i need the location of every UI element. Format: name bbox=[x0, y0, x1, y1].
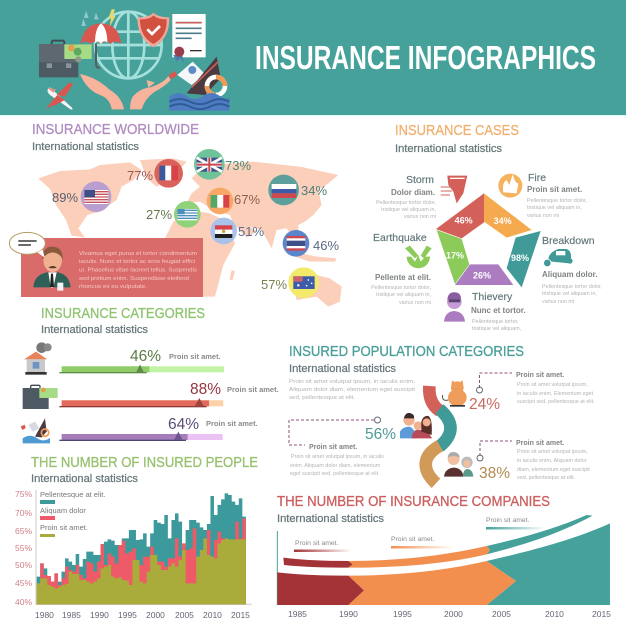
value: 46%: 46% bbox=[313, 238, 339, 253]
series label 3: Proin sit amet. bbox=[486, 517, 530, 524]
pentagon chart: 17% bbox=[446, 251, 464, 261]
panel: insurance cases bbox=[371, 123, 602, 332]
text: elderly: in iaculis enim. Aliquam dolor bbox=[517, 458, 587, 464]
y axis labels: 45% bbox=[15, 578, 32, 588]
label: fire bbox=[527, 172, 587, 219]
heading: insured people: THE NUMBER OF INSURED PEOPLE bbox=[31, 455, 258, 471]
label: fire: tristique vel aliquam in, bbox=[527, 205, 582, 211]
text: elderly: sed, pellentesque at elit. bbox=[517, 475, 575, 481]
label: thievery: Thievery bbox=[472, 291, 513, 303]
flag: Russia 34% bbox=[268, 175, 299, 205]
icon: globe bbox=[95, 12, 162, 78]
icon: businessman bbox=[33, 247, 71, 291]
legend bbox=[40, 490, 105, 537]
icon: sinking ship bbox=[168, 57, 229, 111]
panel: number of insured people bbox=[15, 455, 258, 620]
intro text: sed, pellentesque at elit. bbox=[289, 395, 355, 401]
label: earthquake: Pellentesque tortor dolor, bbox=[371, 285, 431, 291]
text: elderly: Proin sit amet. bbox=[516, 440, 564, 447]
x axis labels: 2005 bbox=[492, 609, 511, 619]
callout text: ur. Phasellus vitae laoreet tellus. Suspendis bbox=[79, 268, 197, 274]
value: 77%: 77% bbox=[127, 168, 153, 183]
flag: UK 73% bbox=[194, 149, 225, 180]
heading: cases: INSURANCE CASES bbox=[395, 123, 519, 139]
heading: categories: INSURANCE CATEGORIES bbox=[41, 306, 205, 322]
x axis labels: 2015 bbox=[592, 609, 611, 619]
label: storm: Storm bbox=[406, 174, 434, 186]
value: 88%: 88% bbox=[190, 381, 221, 398]
text: cat bbox=[516, 372, 595, 405]
label: storm: Dolor diam. bbox=[391, 188, 435, 197]
label: thievery: Pellentesque tortor, bbox=[472, 319, 519, 325]
x axis labels: 1995 bbox=[118, 610, 137, 620]
label: storm bbox=[376, 174, 436, 220]
label: breakdown: Pellentesque tortor dolor, bbox=[542, 284, 602, 290]
callout text: rhoncus ex eu vulputate. bbox=[79, 284, 148, 290]
text: cat: suscipit sed, pellentesque at elit. bbox=[517, 399, 595, 405]
subheading: cases: International statistics bbox=[395, 143, 502, 155]
value: 57%: 57% bbox=[261, 277, 287, 292]
value: 27%: 27% bbox=[146, 207, 172, 222]
label: breakdown bbox=[542, 235, 602, 305]
flag: USA 89% bbox=[81, 181, 111, 212]
label: earthquake: Pellente at elit. bbox=[375, 273, 431, 282]
label: storm: Pellentesque tortor dolor, bbox=[376, 200, 436, 206]
y axis labels: 50% bbox=[15, 560, 32, 570]
intro text bbox=[289, 379, 416, 401]
callout text: iaculis. Nunc et tortor ac eros feugiat effici bbox=[79, 259, 195, 265]
x axis labels: 2010 bbox=[545, 609, 564, 619]
text: family: Proin sit amet volutpat ipsum, in iaculis bbox=[291, 454, 384, 460]
world map bbox=[38, 158, 342, 307]
flag: Australia 57% bbox=[288, 267, 319, 298]
text: elderly bbox=[516, 440, 590, 481]
icon: banknotes bbox=[64, 44, 92, 62]
label: fire: Proin sit amet. bbox=[527, 185, 582, 194]
x axis labels bbox=[288, 609, 611, 619]
y axis labels: 75% bbox=[15, 489, 32, 499]
icon: car bbox=[544, 249, 573, 266]
label: storm: tristique vel aliquam in, bbox=[381, 207, 436, 213]
icon: briefcase small bbox=[23, 385, 58, 409]
icon: ship small bbox=[21, 418, 50, 443]
intro text: Proin sit amet volutpat ipsum, in iaculis enim, bbox=[289, 379, 416, 385]
value: 34%: 34% bbox=[301, 183, 327, 198]
subheading: categories: International statistics bbox=[41, 324, 148, 336]
label: breakdown: varius non mi bbox=[542, 299, 574, 305]
s-curve chart bbox=[426, 386, 450, 483]
x axis labels: 2000 bbox=[444, 609, 463, 619]
dashed connector: cat bbox=[476, 373, 512, 393]
label: fire: Pellentesque tortor dolor, bbox=[527, 198, 587, 204]
callout text: Vivamus eget purus et tortor condimentum bbox=[79, 251, 197, 257]
x axis labels: 1990 bbox=[339, 609, 358, 619]
value: 51%: 51% bbox=[238, 224, 264, 239]
x axis labels: 1980 bbox=[35, 610, 54, 620]
heading: population: INSURED POPULATION CATEGORIES bbox=[289, 344, 524, 360]
pentagon chart bbox=[436, 193, 541, 287]
header icons bbox=[39, 9, 229, 111]
value: 64%: 64% bbox=[168, 416, 199, 433]
y axis labels: 70% bbox=[15, 508, 32, 518]
text: family: Proin sit amet. bbox=[309, 444, 357, 451]
panel: insurance categories bbox=[21, 306, 279, 443]
icon: family bbox=[400, 413, 432, 438]
label: breakdown: Breakdown bbox=[542, 235, 595, 247]
icon: airplane bbox=[46, 83, 73, 109]
value: 56%: 56% bbox=[365, 426, 396, 443]
text: elderly: diam, elementum eget suscipit bbox=[517, 467, 590, 473]
x axis labels: 2015 bbox=[231, 610, 250, 620]
icon: fire bbox=[498, 174, 522, 198]
flag: Italy 67% bbox=[207, 188, 233, 214]
icon: shield bbox=[137, 13, 169, 47]
label: thievery bbox=[471, 291, 526, 332]
label: earthquake: varius non mi bbox=[399, 300, 431, 306]
bar: 88% bbox=[59, 398, 223, 407]
x axis labels: 2000 bbox=[146, 610, 165, 620]
x axis labels: 2005 bbox=[175, 610, 194, 620]
bar label 1: Proin sit amet. bbox=[169, 352, 221, 361]
value: 89%: 89% bbox=[52, 190, 78, 205]
label: earthquake: Earthquake bbox=[373, 232, 427, 244]
value: 73%: 73% bbox=[225, 158, 251, 173]
callout text: sed pretium enim. Suspendisse eleifend bbox=[79, 276, 189, 282]
series label 1: Proin sit amet. bbox=[295, 540, 339, 547]
subheading: population: International statistics bbox=[289, 363, 396, 375]
icon: umbrella bbox=[81, 9, 121, 68]
icon: elderly couple bbox=[444, 452, 473, 477]
subheading: worldwide: International statistics bbox=[32, 141, 139, 153]
icon: cat bbox=[443, 380, 467, 407]
text: cat: in iaculis enim. Elementum eget bbox=[517, 391, 594, 397]
y axis labels bbox=[15, 489, 32, 607]
y axis labels: 55% bbox=[15, 543, 32, 553]
subheading: insured people: International statistics bbox=[31, 473, 138, 485]
heading: companies: THE NUMBER OF INSURANCE COMPANIES bbox=[277, 494, 550, 510]
arrow chart bbox=[277, 515, 610, 605]
label: earthquake: tristique vel aliquam in, bbox=[376, 292, 431, 298]
text: family: eget suscipit sed, pellentesque at elit. bbox=[290, 471, 380, 477]
series label 1 bbox=[294, 540, 352, 552]
bar label 2: Proin sit amet. bbox=[227, 385, 279, 394]
flag: Egypt 51% bbox=[210, 218, 237, 244]
x axis labels bbox=[35, 610, 250, 620]
value: 46%: 46% bbox=[130, 348, 161, 365]
x axis labels: 1985 bbox=[62, 610, 81, 620]
dashed connector: elderly bbox=[477, 441, 512, 461]
pentagon chart: 26% bbox=[473, 270, 491, 280]
bar: 64% bbox=[59, 432, 223, 441]
speech bubble bbox=[9, 232, 45, 258]
label: breakdown: tristique vel aliquam in, bbox=[542, 291, 597, 297]
label: thievery: Nunc et tortor. bbox=[471, 306, 526, 315]
bar: 46% bbox=[59, 364, 224, 373]
text: elderly: Proin sit amet volutpat ipsum, bbox=[517, 449, 588, 455]
value: 38%: 38% bbox=[479, 465, 510, 482]
icon: storm bbox=[441, 176, 467, 203]
icon: briefcase bbox=[39, 41, 78, 77]
series label 2 bbox=[391, 536, 453, 548]
legend: Proin sit amet. bbox=[40, 523, 88, 532]
x axis labels: 1985 bbox=[288, 609, 307, 619]
bar label 3: Proin sit amet. bbox=[206, 419, 258, 428]
flag: Greece 27% bbox=[174, 201, 201, 228]
icon: thief bbox=[444, 292, 465, 322]
value: 67%: 67% bbox=[234, 192, 260, 207]
icon: document bbox=[172, 14, 206, 62]
x axis labels: 1995 bbox=[393, 609, 412, 619]
pentagon chart: 46% bbox=[455, 216, 473, 226]
intro text: Aliquam dolor diam, elementum eget suscipit bbox=[289, 387, 416, 393]
value: 24%: 24% bbox=[469, 396, 500, 413]
icon: house bbox=[24, 342, 52, 375]
dashed connector: family bbox=[289, 417, 380, 445]
label: storm: varius non mi bbox=[404, 214, 436, 220]
series label 2: Proin sit amet. bbox=[391, 536, 435, 543]
label: thievery: tristique vel aliquam, bbox=[472, 326, 522, 332]
icon: earthquake bbox=[405, 246, 432, 268]
x axis labels: 2010 bbox=[203, 610, 222, 620]
panel: insurance worldwide bbox=[9, 122, 342, 307]
x axis labels: 1990 bbox=[90, 610, 109, 620]
text: family: enim. Aliquam dolor diam, elementum bbox=[290, 463, 381, 469]
pentagon chart: 98% bbox=[511, 253, 529, 263]
legend: Aliquam dolor bbox=[40, 506, 86, 515]
text: family bbox=[290, 444, 384, 477]
subheading: companies: International statistics bbox=[277, 513, 384, 525]
label: breakdown: Aliquam dolor. bbox=[542, 270, 598, 279]
flag: Thailand 46% bbox=[283, 230, 309, 257]
panel: insured population categories bbox=[289, 344, 595, 483]
label: earthquake bbox=[371, 232, 431, 306]
y axis labels: 65% bbox=[15, 526, 32, 536]
label: fire: Fire bbox=[528, 172, 546, 184]
text: cat: Proin sit amet volutpat ipsum, bbox=[517, 382, 588, 388]
callout box bbox=[9, 232, 203, 297]
text: cat: Proin sit amet. bbox=[516, 372, 564, 379]
heading: worldwide: INSURANCE WORLDWIDE bbox=[32, 122, 199, 138]
header banner bbox=[0, 0, 626, 116]
series label 3 bbox=[486, 517, 546, 530]
panel: number of insurance companies bbox=[277, 494, 611, 619]
y axis labels: 40% bbox=[15, 597, 32, 607]
label: fire: varius non mi bbox=[527, 213, 559, 219]
flag: France 77% bbox=[154, 159, 183, 188]
legend: Pellentesque at elit. bbox=[40, 490, 105, 499]
pentagon chart: 34% bbox=[494, 216, 512, 226]
area chart bbox=[36, 490, 252, 604]
callout text bbox=[79, 251, 197, 290]
icon: hands bbox=[80, 74, 171, 109]
